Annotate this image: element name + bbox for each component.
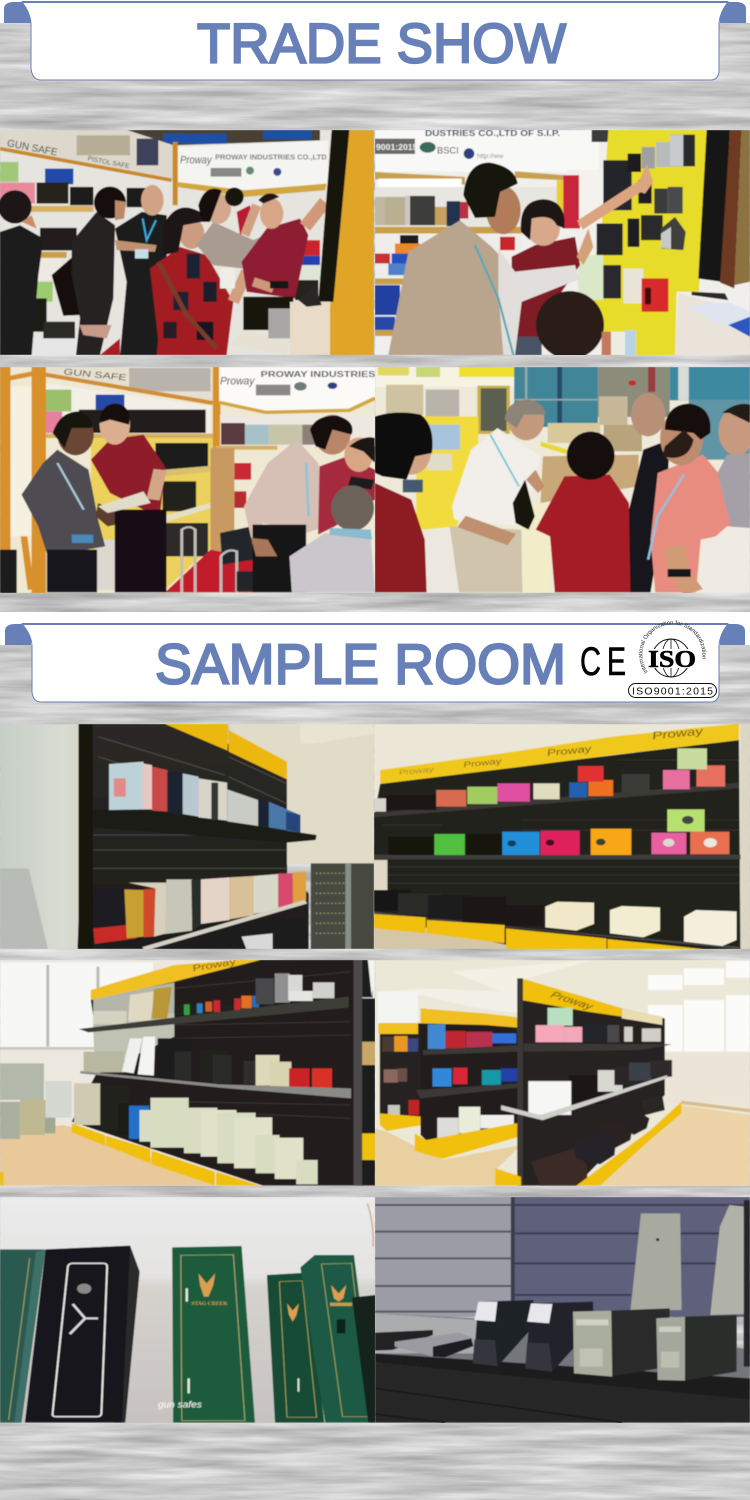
front shelving unit: Proway	[548, 990, 596, 1012]
booth desk with papers	[230, 330, 290, 355]
photo: gun safes leaning against wall	[0, 1197, 375, 1423]
key lock boxes	[578, 135, 695, 312]
yellow plinth	[374, 914, 703, 949]
photo: visitors at booth, gun safe shelves: Proway	[180, 155, 212, 167]
green Stag Creek safe	[172, 1246, 255, 1423]
person: man in beige shirt	[388, 163, 593, 355]
person: man in black at left	[0, 190, 43, 355]
lower shelf safes	[74, 1083, 318, 1184]
middle shelf safes	[388, 809, 729, 855]
person: man in striped shirt, right	[717, 404, 750, 530]
green safe leaning	[300, 1255, 375, 1423]
person: man with beard in pink polo	[629, 393, 732, 592]
black pillar and yellow column	[290, 130, 374, 355]
yellow plinth	[0, 1123, 260, 1186]
high windows	[648, 961, 750, 1052]
photo: man and staff at key lock box wall: 9001:2015	[376, 142, 418, 152]
black upright pistol safes	[473, 1300, 593, 1372]
black slat wall unit	[72, 957, 375, 1186]
black slat wall unit: Proway	[191, 957, 239, 974]
CE certification mark	[580, 640, 626, 684]
framed painting and black frame	[698, 130, 750, 288]
bottom shelf safes	[374, 890, 737, 946]
pistol safes lying flat	[375, 1330, 474, 1357]
ISO certification logo: International Organization for Standardization	[638, 620, 706, 674]
front shelving unit	[495, 978, 682, 1186]
green Stag Creek safe: STAG CREEK	[191, 1300, 228, 1307]
photo: group discussion at booth	[375, 367, 750, 593]
ISO certification logo	[628, 620, 717, 698]
heading banner: trade show	[0, 0, 750, 80]
yellow sign boards	[165, 724, 287, 779]
ammo boxes standing open	[630, 1200, 750, 1367]
photo: visitors inspecting safes	[0, 367, 376, 593]
person: woman in red pattern	[150, 207, 247, 355]
teal safe at left edge	[0, 1249, 45, 1423]
person: staff woman in red	[512, 164, 653, 355]
ISO certification logo: ISO	[648, 647, 696, 673]
orange booth frame	[0, 367, 46, 593]
framed pictures top shelf	[93, 987, 172, 1024]
photo: ammo boxes and pistol safes on shelf	[375, 1197, 750, 1423]
side table with brochures	[675, 292, 750, 355]
person: man in white shirt	[450, 399, 545, 592]
photo: sample room aisle with three shelving units	[375, 960, 750, 1186]
photo: book-style safes on slat wall shelves	[0, 724, 374, 949]
person: woman in red polo	[318, 437, 375, 535]
person: foreground arm and white shirt	[668, 526, 750, 592]
photo: man and staff at key lock box wall: BSCI	[437, 145, 459, 155]
title: trade show: TRADE SHOW	[197, 12, 566, 74]
person: woman in beige jacket	[197, 188, 268, 268]
yellow logo boards: Proway	[546, 744, 594, 758]
black gun safe with dial	[25, 1246, 140, 1423]
chair	[182, 526, 254, 592]
caption: gun safes: gun safes	[158, 1400, 202, 1410]
CE certification mark: E	[607, 640, 626, 684]
person: seated man from behind	[289, 485, 375, 592]
person: woman in red from behind	[536, 432, 631, 592]
person: man in grey shirt	[22, 411, 124, 592]
person: man with lanyard	[115, 185, 167, 355]
windows	[0, 962, 153, 1050]
yellow logo boards: Proway	[651, 725, 706, 742]
black slat wall	[77, 724, 308, 949]
photo: man and staff at key lock box wall: http://ww	[477, 153, 503, 160]
middle shelf items	[84, 1037, 332, 1090]
lower shelf with book safes	[93, 872, 306, 949]
key cabinet in corner	[311, 863, 374, 949]
title: sample room: SAMPLE ROOM	[155, 632, 566, 696]
photo: visitors inspecting safes: GUN SAFE	[63, 367, 127, 383]
slat wall lines	[375, 1197, 750, 1420]
ISO certification logo: ISO9001:2015	[632, 686, 713, 698]
grey cabinets on floor	[0, 1063, 72, 1139]
person: woman in dark red polo, left	[375, 413, 433, 592]
top shelf safes	[374, 748, 725, 812]
person: man in red polo	[242, 193, 325, 330]
CE certification mark: C	[580, 640, 601, 684]
green safe small	[267, 1273, 324, 1423]
sign with company name	[213, 367, 376, 457]
middle shelving unit	[415, 1008, 520, 1159]
yellow logo boards: Proway	[463, 757, 503, 770]
glass windows in background	[514, 367, 750, 460]
photo: colourful hotel safes on three shelves	[374, 724, 750, 949]
person: seated man, back of head	[536, 291, 611, 359]
yellow logo boards: Proway	[398, 765, 435, 777]
photo: visitors at booth, gun safe shelves: PISTOL SAFE	[87, 155, 131, 170]
yellow logo boards	[380, 723, 739, 784]
yellow display wall	[588, 130, 708, 355]
person: man in pink striped shirt	[244, 415, 353, 592]
ammo boxes on shelf	[573, 1308, 737, 1381]
heading banner: sample room	[0, 612, 750, 702]
photo: man and staff at key lock box wall: DUSTRIES CO.,LTD OF S.I.P.	[425, 128, 560, 138]
person: man with backpack	[52, 187, 126, 355]
sign with company name: Proway	[220, 374, 255, 387]
back shelving unit	[378, 1023, 423, 1131]
person: man in red polo with glasses	[91, 404, 166, 592]
photo: visitors at booth, gun safe shelves: GUN SAFE	[6, 138, 59, 159]
photo: wall safes and cabinets on display	[0, 957, 375, 1186]
red carpet floor	[165, 550, 254, 592]
photo: visitors at booth, gun safe shelves	[0, 130, 374, 355]
upper shelf with book safes	[93, 762, 317, 843]
key lock boxes	[174, 973, 334, 1015]
photo: visitors at booth, gun safe shelves: PROWAY INDUSTRIES CO.,LTD	[215, 152, 327, 161]
photo: man and staff at key lock box wall	[375, 128, 750, 355]
